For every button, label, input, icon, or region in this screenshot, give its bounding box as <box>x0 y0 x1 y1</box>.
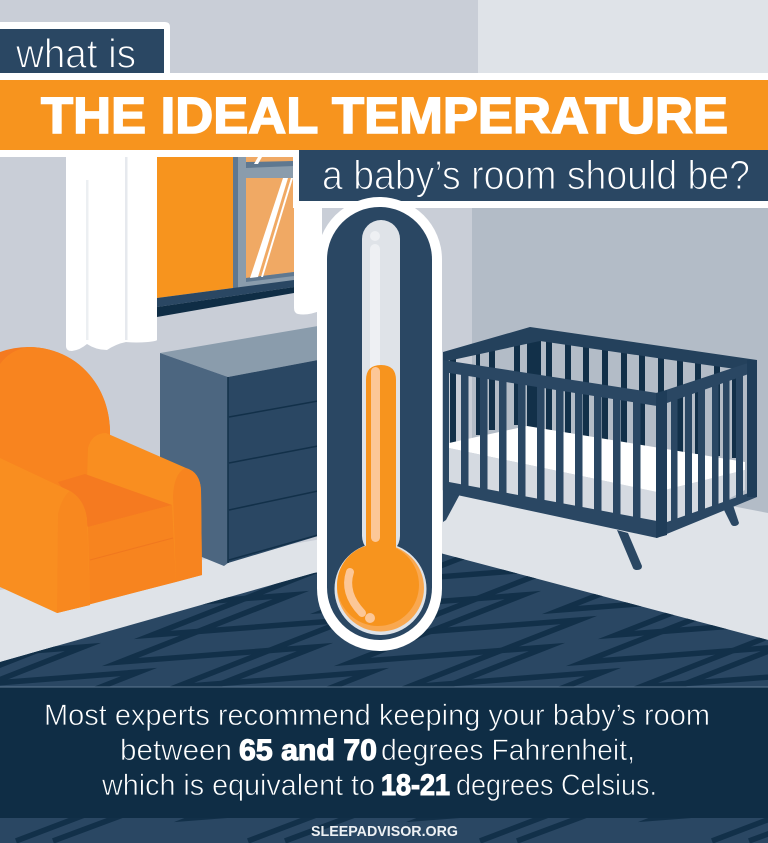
chair seat <box>58 474 172 527</box>
chair back <box>0 347 110 500</box>
recommendation band <box>0 686 768 818</box>
recommendation text: 18-21 <box>381 769 450 802</box>
window <box>157 150 294 317</box>
crib corner posts <box>656 390 667 538</box>
recommendation text: which is equivalent to <box>101 769 375 802</box>
thermometer glass tube <box>362 220 400 555</box>
crib back rail <box>443 327 757 372</box>
thermometer outer body <box>317 197 442 651</box>
chair right arm <box>57 433 202 613</box>
crib <box>443 327 757 570</box>
recommendation text: 65 and 70 <box>239 734 377 767</box>
recommendation text <box>44 699 710 802</box>
thermometer bulb <box>334 543 426 635</box>
floor <box>0 455 768 700</box>
dresser front <box>228 360 318 563</box>
dresser <box>160 326 318 566</box>
crib back slats <box>450 330 738 458</box>
dresser top <box>160 326 318 377</box>
header: what is <box>0 22 170 80</box>
thermometer <box>317 197 442 651</box>
thermometer mercury column <box>366 365 396 550</box>
chair cushions <box>88 505 176 604</box>
recommendation text: between <box>120 734 232 767</box>
carpet <box>0 554 768 843</box>
recommendation text: degrees Celsius. <box>456 769 657 802</box>
left curtain <box>66 150 157 351</box>
header: the ideal temperature <box>0 73 768 157</box>
chair left arm <box>0 458 90 613</box>
header: the ideal temperature: THE IDEAL TEMPERATURE <box>41 87 728 144</box>
dresser side <box>160 353 228 566</box>
recommendation text: Most experts recommend keeping your baby’s room <box>44 699 710 732</box>
crib mattress <box>449 426 745 538</box>
crib front slats <box>443 362 743 525</box>
right curtain <box>294 200 322 314</box>
recommendation text: degrees Fahrenheit, <box>381 734 635 767</box>
thermometer highlights <box>348 572 362 613</box>
crib legs <box>443 490 739 570</box>
source: sleepadvisor.org: SLEEPADVISOR.ORG <box>311 823 458 840</box>
crib rails <box>443 360 757 406</box>
header: what is: what is <box>15 30 136 76</box>
armchair <box>0 347 202 613</box>
